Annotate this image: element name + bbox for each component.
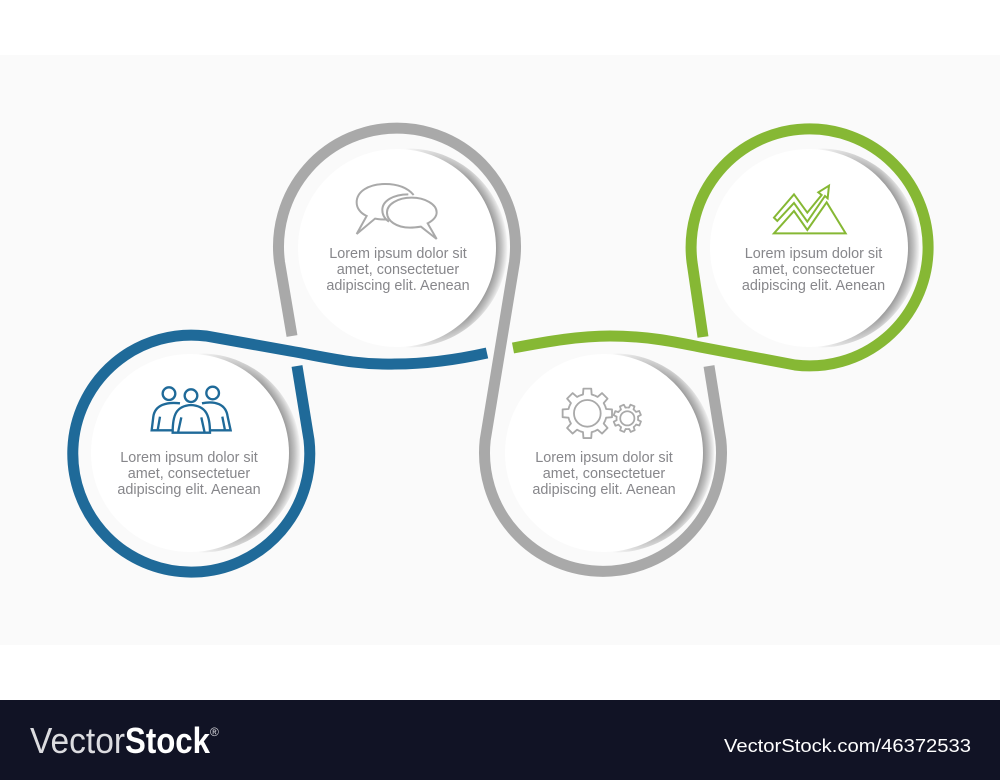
ribbon: green loop — [513, 129, 928, 366]
text block: Lorem ipsum dolor sit — [745, 246, 882, 262]
circle with shadow — [204, 354, 300, 552]
icon: growth chart arrow — [774, 186, 846, 233]
page background panel — [0, 55, 1000, 645]
icon: people — [152, 387, 231, 433]
panel: chat step: adipiscing elit. Aenean — [326, 278, 470, 294]
panel: people step: amet, consectetuer — [128, 466, 250, 482]
ribbon: gray double loop — [278, 128, 722, 571]
footer logo — [30, 720, 219, 761]
panel: chat step: amet, consectetuer — [337, 262, 459, 278]
circle with shadow — [410, 149, 507, 347]
panel: growth step: amet, consectetuer — [752, 262, 875, 278]
footer bar — [0, 700, 1000, 780]
ribbon: blue loop — [73, 335, 487, 572]
text block: Lorem ipsum dolor sit — [120, 450, 258, 466]
circle with shadow — [822, 149, 919, 347]
panel: gears step: amet, consectetuer — [543, 466, 665, 482]
panel: gears step — [533, 354, 714, 552]
footer image id: VectorStock.com/46372533 — [724, 735, 971, 756]
circle with shadow — [618, 354, 714, 552]
panel: people step: adipiscing elit. Aenean — [117, 482, 261, 498]
panel: growth step: adipiscing elit. Aenean — [742, 278, 885, 294]
panel: growth step — [742, 149, 919, 347]
footer logo: ® — [210, 725, 219, 739]
panel: gears step: adipiscing elit. Aenean — [532, 482, 676, 498]
footer logo: Stock — [125, 720, 211, 761]
panel: people step — [118, 354, 300, 552]
text block: Lorem ipsum dolor sit — [329, 246, 467, 262]
footer logo: Vector — [30, 720, 125, 761]
icon: speech bubbles — [357, 184, 437, 239]
text block: Lorem ipsum dolor sit — [535, 450, 673, 466]
panel: chat step — [327, 149, 507, 347]
icon: gears — [563, 389, 642, 438]
